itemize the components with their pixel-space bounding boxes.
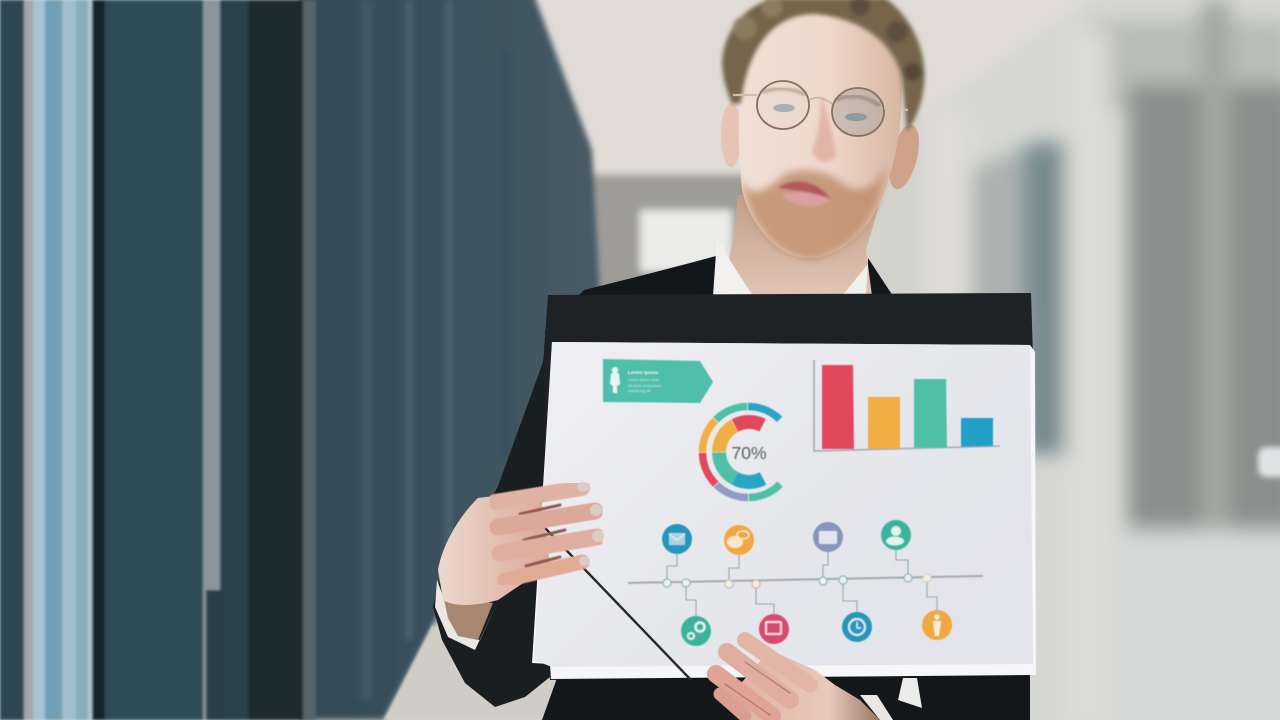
outer ring bbox=[684, 388, 812, 516]
light reflection bbox=[1258, 447, 1280, 477]
banner text: Lorem ipsum dolor bbox=[628, 378, 660, 382]
banner text: sit amet consectetur bbox=[628, 384, 663, 388]
hair bbox=[722, 0, 925, 132]
mouth bbox=[778, 182, 831, 206]
right hand bbox=[716, 640, 880, 720]
icon: person bbox=[610, 367, 620, 393]
icon: person bbox=[922, 610, 952, 640]
icon: clock bbox=[842, 612, 872, 642]
connectors bbox=[667, 550, 937, 616]
folder strap line bbox=[545, 528, 691, 680]
icon: monitor bbox=[759, 614, 789, 644]
black folder bbox=[544, 293, 1034, 680]
shirt collar bbox=[713, 238, 868, 296]
jacket shoulders bbox=[542, 256, 1030, 720]
banner label bbox=[603, 359, 713, 403]
neck bbox=[722, 195, 882, 296]
right shirt cuff bbox=[860, 695, 893, 720]
icon: chat bbox=[724, 525, 754, 555]
wrist bbox=[443, 595, 493, 640]
fingernails bbox=[577, 482, 604, 566]
white shirt gap bbox=[898, 678, 922, 708]
donut chart bbox=[684, 388, 812, 516]
bar chart bbox=[814, 360, 1000, 451]
presenter: head and shoulders bbox=[542, 0, 1030, 720]
icon: folder bbox=[813, 522, 843, 552]
eyes bbox=[762, 89, 880, 121]
inner ring bbox=[708, 411, 790, 493]
banner text: adipiscing elit bbox=[628, 389, 652, 393]
main sheet bbox=[534, 342, 1033, 667]
timeline nodes bbox=[663, 574, 931, 588]
timeline axis bbox=[628, 576, 983, 583]
banner text: Lorem Ipsum bbox=[628, 370, 658, 376]
icon: mail bbox=[662, 524, 692, 554]
nose shade bbox=[812, 95, 836, 162]
left shirt cuff bbox=[435, 580, 497, 650]
donut value: 70% bbox=[731, 443, 767, 463]
left hand bbox=[438, 482, 604, 640]
back sheet edge bbox=[532, 342, 1036, 679]
palm bbox=[438, 490, 550, 605]
presenter: left sleeve bbox=[433, 300, 550, 707]
banner text bbox=[628, 370, 663, 393]
window and pillars bbox=[0, 0, 316, 720]
corridor floor bbox=[384, 624, 560, 720]
corridor ceiling bbox=[520, 0, 1100, 180]
timeline bbox=[628, 520, 983, 646]
round glasses bbox=[733, 81, 908, 136]
right wall panels bbox=[870, 0, 1280, 720]
icon: gears bbox=[681, 616, 711, 646]
ears bbox=[721, 103, 925, 192]
face bbox=[739, 13, 902, 258]
corridor far end bbox=[585, 175, 750, 290]
icon: users bbox=[881, 520, 911, 550]
left dark glass wall bbox=[300, 0, 600, 720]
fingers bbox=[495, 488, 597, 580]
paper infographic sheet bbox=[532, 342, 1036, 679]
beard bbox=[740, 165, 886, 260]
